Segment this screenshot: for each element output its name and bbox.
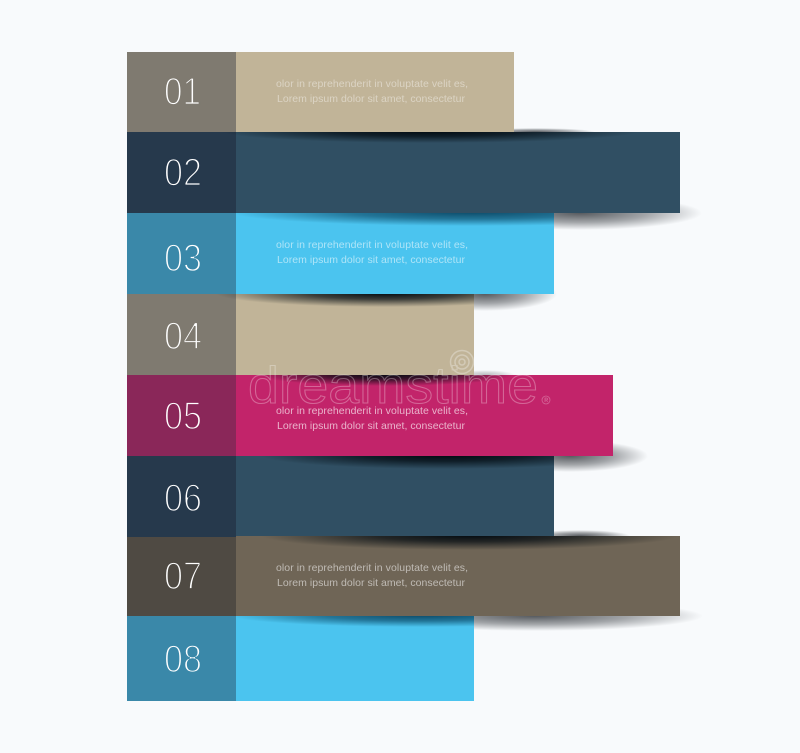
number 03: 03 [164,237,202,280]
panel: row 01 text band [236,52,514,132]
shadow on row 08 [240,616,474,626]
text block 03: Lorem ipsum dolor sit amet, consectetur [277,254,466,266]
panel: row 08 number block [127,616,236,701]
panel: row 07 number block [127,537,236,616]
text block 07: olor in reprehenderit in voluptate velit es, [276,562,468,574]
row 06 [127,456,554,537]
panel: row 06 number block [127,456,236,537]
shadow on row 05 [262,375,510,386]
row 08 [127,616,474,701]
text block 07 [276,562,468,589]
panel: row 02 text band [236,132,680,213]
number 06: 06 [164,477,202,520]
number 04: 04 [164,315,202,358]
panel: row 03 text band [236,213,554,294]
cast shadows on background [367,128,703,631]
panel: row 05 text band [236,375,613,456]
row 03 [127,213,554,294]
text block 05 [276,405,468,432]
panel: row 05 number block [127,375,236,456]
panel: row 04 text band [236,294,474,375]
number 01: 01 [164,70,201,114]
watermark spiral icon [450,350,474,374]
text block 01: olor in reprehenderit in voluptate velit es, [276,78,468,90]
text block 01: Lorem ipsum dolor sit amet, consectetur [277,93,466,105]
number 08: 08 [164,638,202,681]
panel: row 06 text band [236,456,554,537]
text block 05: Lorem ipsum dolor sit amet, consectetur [277,420,466,432]
row 01 [127,52,514,132]
shadow on row 02 [238,132,622,142]
shadow on row 07 [274,536,666,549]
shadow on row 04 [225,294,474,306]
number 02: 02 [164,152,202,194]
watermark registered mark [542,396,550,404]
shadow on row 03 [242,213,554,226]
panel: row 03 number block [127,213,236,294]
text block 03: olor in reprehenderit in voluptate velit es, [276,239,468,251]
panel: row 08 text band [236,616,474,701]
panel: row 04 number block [127,294,236,375]
panel: row 01 number block [127,52,236,132]
number 05: 05 [164,395,202,438]
row 02 [127,132,680,213]
text block 03 [276,239,468,266]
row 05 [127,375,613,456]
panel: row 02 number block [127,132,236,213]
watermark [248,350,550,415]
row 04 [127,294,474,375]
row 07 [127,536,680,616]
text block 05: olor in reprehenderit in voluptate velit es, [276,405,468,417]
watermark wordmark: dreamstime [248,357,538,415]
number 07: 07 [164,555,202,598]
shadow on row 06 [275,456,554,468]
panel: row 07 text band [236,536,680,616]
text block 01 [276,78,468,105]
text block 07: Lorem ipsum dolor sit amet, consectetur [277,577,466,589]
